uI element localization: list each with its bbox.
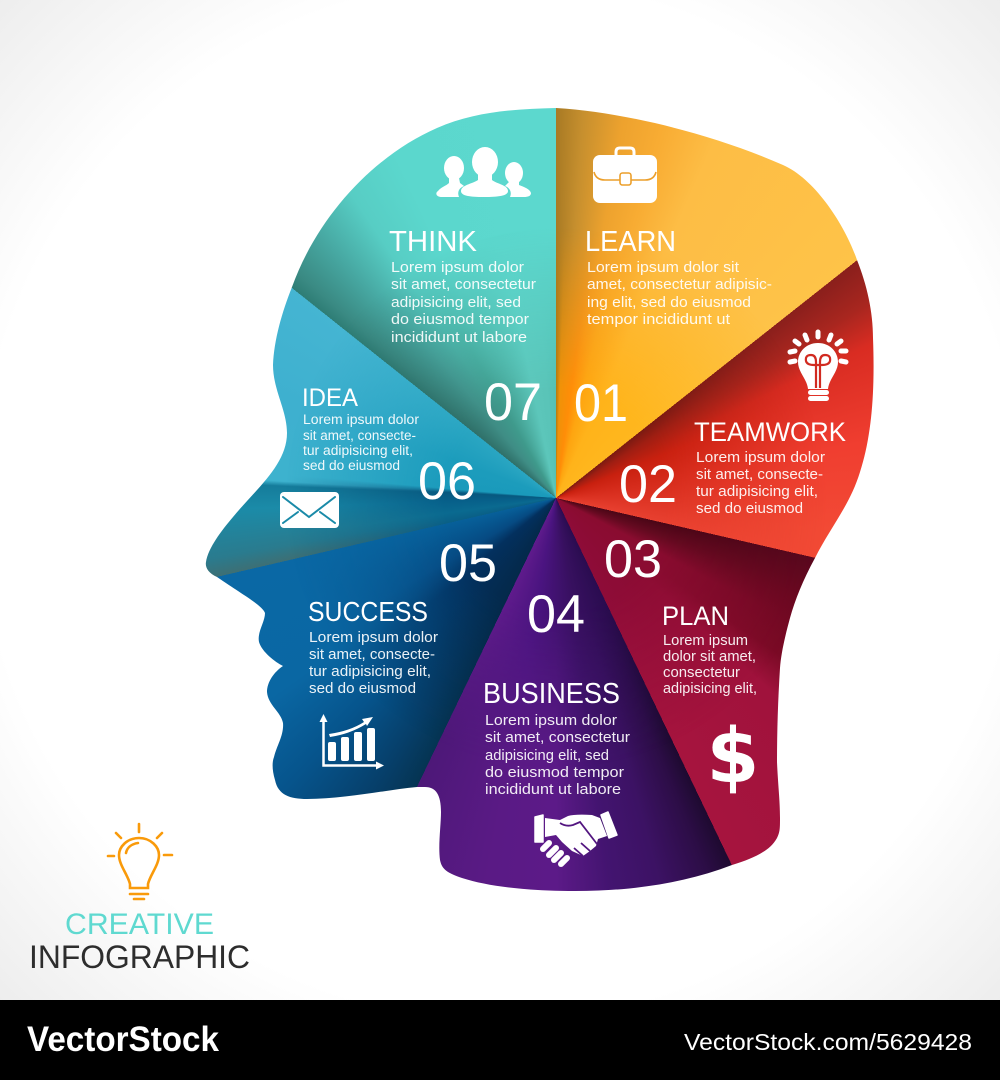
block: plan: PLAN [662, 601, 729, 631]
block: teamwork: Lorem ipsum dolor [696, 449, 825, 466]
block: plan [662, 601, 757, 697]
segment 05 success [217, 498, 556, 799]
block: success [308, 596, 438, 697]
block: teamwork [694, 417, 846, 517]
block: think: do eiusmod tempor [391, 311, 529, 328]
number labels: 03 [604, 530, 662, 589]
segment 07 think [292, 108, 556, 498]
block: learn: LEARN [585, 226, 676, 258]
block: business: do eiusmod tempor [485, 764, 624, 781]
icon: lightbulb [790, 332, 846, 401]
number labels: 07 [484, 373, 542, 432]
icon: handshake [535, 812, 617, 864]
block: success: SUCCESS [308, 596, 428, 627]
block: learn [585, 226, 772, 328]
segment 01 learn [556, 108, 857, 498]
block: business: incididunt ut labore [485, 781, 621, 798]
segment 02 teamwork [556, 260, 873, 558]
block: plan: consectetur [663, 664, 740, 681]
logo icon: outline bulb [108, 824, 172, 899]
icon: envelope [280, 492, 339, 528]
number labels: 02 [619, 455, 677, 514]
logo text: CREATIVE [65, 908, 214, 941]
block: think: THINK [389, 226, 478, 258]
block: business: Lorem ipsum dolor [485, 712, 617, 729]
footer bar: VectorStock.com/5629428 [684, 1029, 972, 1055]
icon: people [436, 147, 531, 197]
block: teamwork: tur adipisicing elit, [696, 483, 818, 500]
block: learn: ing elit, sed do eiusmod [587, 294, 751, 311]
block: think: incididunt ut labore [391, 329, 527, 346]
block: success: sed do eiusmod [309, 680, 416, 697]
number labels: 06 [418, 452, 476, 511]
block: business: adipisicing elit, sed [485, 747, 609, 764]
block: business [483, 678, 630, 798]
segment 03 plan [556, 498, 815, 865]
block: teamwork: sed do eiusmod [696, 500, 803, 517]
block: idea: sit amet, consecte- [303, 428, 416, 443]
number labels [418, 373, 677, 644]
block: idea: IDEA [302, 384, 358, 412]
icon: briefcase [593, 148, 657, 203]
segment 04 business [417, 498, 732, 891]
segment 06 idea [206, 288, 556, 577]
number labels: 01 [574, 374, 628, 433]
block: business: BUSINESS [483, 678, 620, 710]
block: learn: Lorem ipsum dolor sit [587, 259, 740, 276]
block: learn: tempor incididunt ut [587, 311, 731, 328]
block: success: Lorem ipsum dolor [309, 629, 438, 646]
footer bar: VectorStock [27, 1020, 220, 1059]
block: idea: tur adipisicing elit, [303, 443, 413, 458]
block: business: sit amet, consectetur [485, 729, 630, 746]
icon: dollar: $ [707, 711, 759, 800]
block: idea [302, 384, 420, 473]
block: idea: sed do eiusmod [303, 458, 400, 473]
block: think: adipisicing elit, sed [391, 294, 521, 311]
block: plan: dolor sit amet, [663, 648, 756, 665]
block: success: tur adipisicing elit, [309, 663, 431, 680]
logo text [29, 908, 250, 975]
footer bar [0, 1000, 1000, 1080]
block: success: sit amet, consecte- [309, 646, 435, 663]
block: think [389, 226, 536, 346]
block: learn: amet, consectetur adipisic- [587, 276, 772, 293]
block: idea: Lorem ipsum dolor [303, 412, 420, 427]
block: teamwork: sit amet, consecte- [696, 466, 823, 483]
logo text: INFOGRAPHIC [29, 939, 250, 975]
number labels: 04 [527, 585, 585, 644]
icon: growth chart [320, 714, 384, 770]
block: plan: Lorem ipsum [663, 632, 748, 649]
block: think: Lorem ipsum dolor [391, 259, 524, 276]
number labels: 05 [439, 534, 497, 593]
block: teamwork: TEAMWORK [694, 417, 846, 447]
head pie chart [206, 108, 874, 891]
block: plan: adipisicing elit, [663, 680, 757, 697]
block: think: sit amet, consectetur [391, 276, 536, 293]
